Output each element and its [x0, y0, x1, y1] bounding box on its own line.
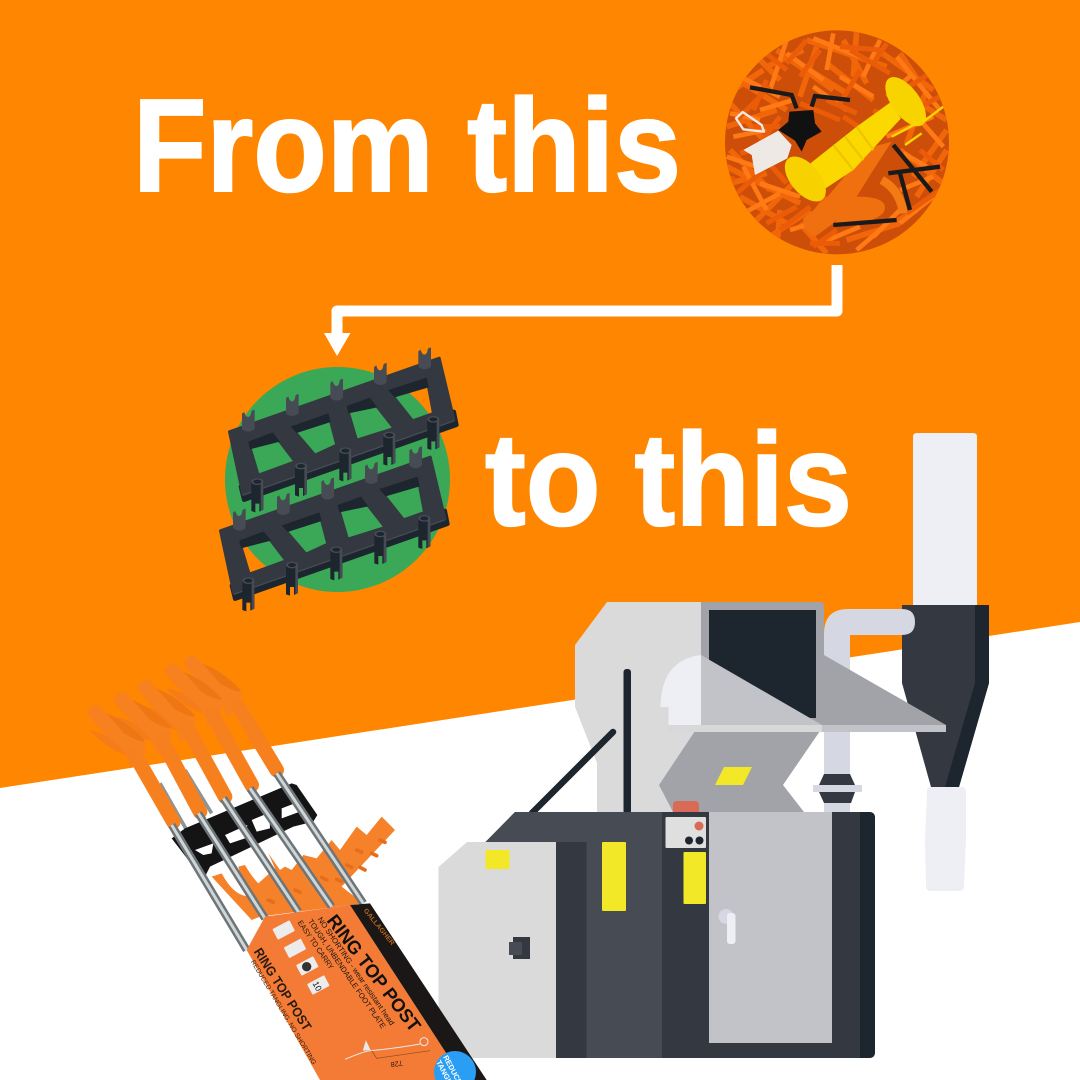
granulator body: [438, 812, 875, 1058]
feature badges: 10: [311, 980, 324, 993]
blue badge: [434, 1051, 476, 1080]
left cabinet: [438, 842, 556, 1058]
duct pipe: [813, 609, 915, 812]
black footplate: [172, 783, 317, 877]
arrow from photo to plates: [324, 265, 837, 356]
feature badges: [272, 920, 330, 995]
side tagline: REDUCED TANGLING, NO SHORTING: [249, 959, 317, 1066]
feature list: NO SHORTING - wear resistant head: [316, 915, 396, 1027]
title: to this: to this: [485, 406, 852, 553]
title: From this: From this: [133, 72, 681, 219]
yellow spool: [784, 77, 944, 202]
package front: [247, 905, 464, 1080]
rear thin rods: [160, 770, 212, 830]
product: ring top posts in package: [87, 655, 487, 1080]
granulator hopper: [532, 602, 946, 814]
feature list: TOUGH, UNBENDABLE FOOT PLATE: [306, 917, 387, 1030]
white clip: [736, 112, 792, 175]
large orange hook: [803, 142, 903, 237]
product name: RING TOP POST: [323, 910, 426, 1036]
footplate illustration: [220, 347, 457, 611]
black wire pieces: [750, 87, 940, 225]
footplate lugs: [268, 840, 385, 902]
side product name: RING TOP POST: [251, 945, 314, 1033]
yellow stripes: [602, 842, 626, 911]
control panel: [666, 817, 706, 848]
feature list: EASY TO CARRY: [296, 919, 336, 971]
cyclone dust collector: [902, 433, 989, 891]
dimension label: 728: [390, 1059, 403, 1069]
white lower background: [0, 622, 1080, 1080]
photo: pile of scrap plastic: [720, 28, 950, 257]
post diagram: [345, 1038, 430, 1059]
orange footplate: [212, 817, 395, 920]
green circle: [225, 367, 450, 592]
package black strip: [350, 903, 487, 1080]
posts: [87, 655, 363, 950]
brand name: GALLAGHER: [362, 908, 396, 947]
door: [709, 812, 832, 1043]
black insulator: [778, 110, 822, 152]
